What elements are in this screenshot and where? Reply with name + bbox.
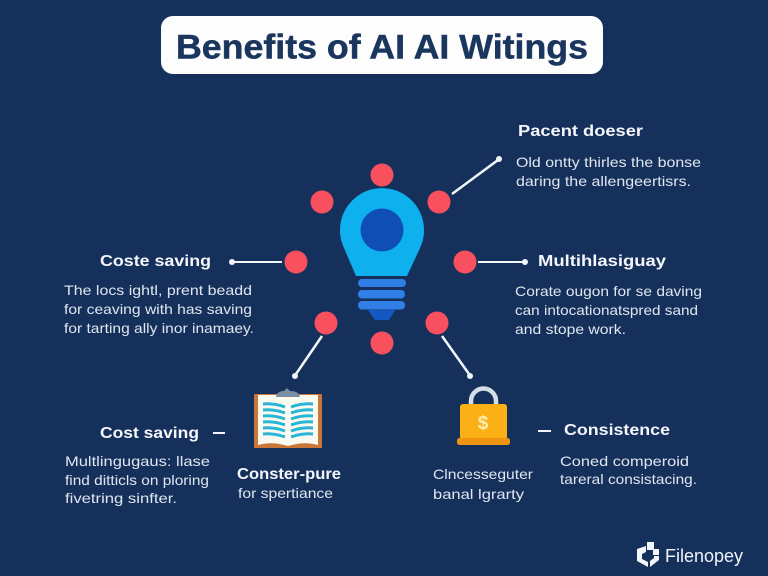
title (161, 16, 603, 74)
text block: top right: Pacent doeser (518, 123, 643, 140)
text block: right: and stope work. (515, 321, 626, 337)
connector: left (229, 259, 282, 265)
text block: consistence (560, 422, 697, 487)
connector: upper right (452, 156, 502, 194)
text block: cost saving: fivetring sinfter. (65, 490, 177, 506)
text block: cost saving: find ditticls on ploring (65, 472, 209, 488)
icon: padlock with dollar (457, 388, 510, 445)
connector: lower left (292, 336, 322, 379)
dash: cost saving (213, 432, 225, 434)
text block: center left: for spertiance (238, 485, 333, 501)
text block: left: for ceaving with has saving (64, 301, 252, 317)
text block: right: can intocationatspred sand (515, 302, 698, 318)
text block: top right (516, 123, 701, 189)
text block: top right: Old ontty thirles the bonse (516, 154, 701, 170)
text block: right (515, 253, 702, 337)
connector: right (478, 259, 528, 265)
text block: center left (237, 466, 341, 501)
title: Benefits of AI AI Witings (176, 28, 588, 66)
text block: left (64, 253, 254, 336)
text block: center right (433, 466, 533, 502)
logo (637, 542, 743, 567)
text block: consistence: Coned comperoid (560, 453, 689, 469)
text block: top right: daring the allengeertisrs. (516, 173, 691, 189)
dash: consistence (538, 430, 551, 432)
text block: consistence: Consistence (564, 422, 670, 439)
red dots ring (284, 164, 476, 354)
text block: center right: banal lgrarty (433, 486, 524, 502)
text block: cost saving: Cost saving (100, 425, 199, 442)
icon: padlock with dollar: $ (478, 413, 489, 434)
text block: left: for tarting ally inor inamaey. (64, 320, 254, 336)
text block: cost saving (65, 425, 210, 506)
text block: center left: Conster-pure (237, 466, 341, 483)
text block: left: Coste saving (100, 253, 211, 270)
icon: open book (254, 388, 322, 448)
text block: left: The locs ightl, prent beadd (64, 282, 252, 298)
text block: right: Corate ougon for se daving (515, 283, 702, 299)
text block: consistence: tareral consistacing. (560, 471, 697, 487)
text block: cost saving: Multlingugaus: llase (65, 453, 210, 469)
icon: light bulb (340, 188, 424, 320)
logo: Filenopey (665, 546, 743, 566)
connector: lower right (442, 336, 473, 379)
text block: center right: Clncesseguter (433, 466, 533, 482)
text block: right: Multihlasiguay (538, 253, 666, 270)
